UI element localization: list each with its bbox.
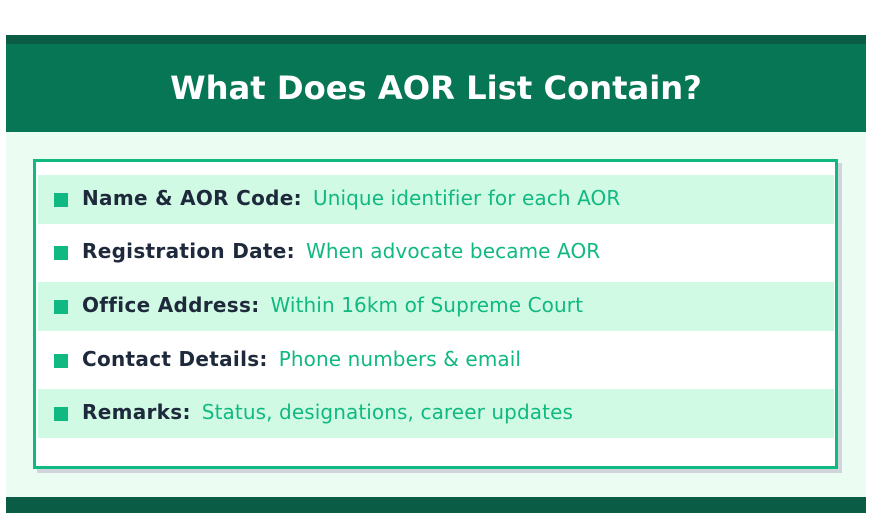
row: name: Name & AOR Code: xyxy=(82,186,302,210)
row: remarks xyxy=(38,389,834,438)
title: What Does AOR List Contain? xyxy=(170,69,702,107)
row: registration: When advocate became AOR xyxy=(306,239,600,263)
header bar xyxy=(6,35,866,132)
panel: list box xyxy=(33,159,838,469)
row: name: Unique identifier for each AOR xyxy=(313,186,620,210)
row: contact: Contact Details: xyxy=(82,347,268,371)
row: name xyxy=(38,175,834,224)
row: remarks: Remarks: xyxy=(82,400,191,424)
row: contact xyxy=(54,347,521,371)
row: office: Within 16km of Supreme Court xyxy=(270,293,583,317)
row: registration: Registration Date: xyxy=(82,239,295,263)
row: registration xyxy=(54,239,600,263)
row: contact: Phone numbers & email xyxy=(279,347,521,371)
row: remarks: Status, designations, career updates xyxy=(202,400,573,424)
row: office: Office Address: xyxy=(82,293,260,317)
footer bar xyxy=(6,497,866,513)
row: office xyxy=(38,282,834,331)
